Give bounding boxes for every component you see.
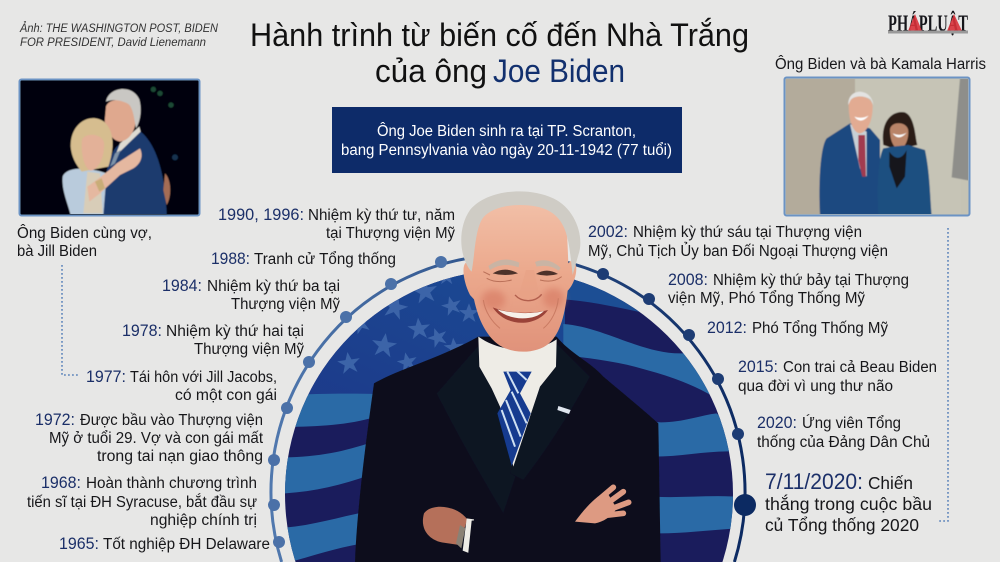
title: Hành trình từ biến cố đến Nhà Trắng	[250, 17, 749, 53]
photo credit: FOR PRESIDENT, David Lienemann	[20, 37, 206, 49]
timeline: 1968: 1968:	[41, 474, 81, 492]
left hand	[423, 507, 467, 545]
caption: Biden and Jill: bà Jill Biden	[17, 243, 97, 260]
timeline ring	[268, 255, 745, 562]
timeline: 7/11/2020: thắng trong cuộc bầu	[765, 493, 932, 514]
right hand	[575, 495, 616, 524]
brows	[488, 260, 561, 271]
timeline dots: right	[597, 268, 756, 516]
timeline: 1978: Nhiệm kỳ thứ hai tại	[166, 323, 304, 340]
timeline: 1984: Nhiệm kỳ thứ ba tại	[207, 278, 340, 295]
timeline: 1978	[122, 322, 304, 358]
title: của ông	[375, 53, 487, 89]
timeline: 1977: có một con gái	[175, 387, 277, 404]
timeline: 1978: 1978:	[122, 322, 162, 340]
cuff and watch	[463, 518, 474, 554]
timeline: 1984: Thượng viện Mỹ	[231, 296, 340, 313]
timeline: 2008: Nhiệm kỳ thứ bảy tại Thượng	[713, 272, 909, 289]
timeline: 1984	[162, 277, 340, 313]
timeline: 2015: 2015:	[738, 358, 778, 376]
flag circle	[285, 274, 733, 562]
timeline: 1972: 1972:	[35, 411, 75, 429]
timeline: 2008: 2008:	[668, 271, 708, 289]
photo: Biden and Kamala Harris	[784, 78, 970, 216]
timeline: 1972	[35, 411, 264, 465]
caption: Biden and Jill	[17, 225, 152, 260]
timeline: 2002: 2002:	[588, 223, 628, 241]
timeline: 2002	[588, 223, 888, 260]
face shading	[481, 288, 564, 310]
timeline: 1968: Hoàn thành chương trình	[86, 475, 257, 492]
sleeve shading	[468, 520, 474, 554]
timeline: 2008	[668, 271, 909, 307]
timeline: 1977: 1977:	[86, 368, 126, 386]
timeline: 2015: qua đời vì ung thư não	[738, 378, 893, 395]
timeline dots: left	[268, 256, 447, 548]
timeline: 1990, 1996: 1990, 1996:	[218, 206, 304, 224]
panel: birth info: Ông Joe Biden sinh ra tại TP. Scranton,	[377, 123, 636, 140]
timeline: 2002: Mỹ, Chủ Tịch Ủy ban Đối Ngoại Thượng viện	[588, 242, 888, 260]
hair	[461, 191, 580, 275]
timeline: 2012: 2012:	[707, 319, 747, 337]
timeline: 1990, 1996: tại Thượng viện Mỹ	[326, 225, 455, 242]
timeline: 1988: Tranh cử Tổng thống	[254, 251, 396, 268]
pin	[557, 406, 571, 414]
timeline: 1988: 1988:	[211, 250, 250, 268]
photo credit: Ảnh: THE WASHINGTON POST, BIDEN	[19, 22, 219, 35]
caption: Biden and Harris: Ông Biden và bà Kamala Harris	[775, 56, 986, 73]
connector: left dotted line	[62, 265, 80, 375]
title: Joe Biden	[493, 53, 625, 89]
tie	[497, 372, 532, 466]
timeline: 2020: 2020:	[757, 414, 797, 432]
timeline: 2012	[707, 319, 888, 337]
timeline: 1978: Thượng viện Mỹ	[194, 341, 304, 358]
timeline: 7/11/2020: củ Tổng thống 2020	[765, 515, 919, 535]
timeline: 2020	[757, 414, 930, 451]
caption: Biden and Jill: Ông Biden cùng vợ,	[17, 225, 152, 242]
title	[250, 17, 749, 89]
timeline: 1965: Tốt nghiệp ĐH Delaware	[103, 536, 270, 553]
nose	[519, 270, 539, 299]
jacket	[355, 337, 661, 562]
flag stars	[338, 278, 477, 374]
timeline: 7/11/2020	[765, 469, 932, 535]
smile	[493, 307, 548, 323]
timeline: 2002: Nhiệm kỳ thứ sáu tại Thượng viện	[633, 224, 862, 241]
timeline: 1984: 1984:	[162, 277, 202, 295]
eye wrinkles	[483, 272, 562, 282]
shirt	[478, 337, 557, 467]
timeline: 1965: 1965:	[59, 535, 99, 553]
timeline: 1990, 1996: Nhiệm kỳ thứ tư, năm	[308, 207, 455, 224]
timeline: 2008: viện Mỹ, Phó Tổng Thống Mỹ	[668, 290, 865, 307]
panel: birth info	[332, 107, 682, 173]
timeline: 1968: tiến sĩ tại ĐH Syracuse, bắt đầu sự	[27, 494, 257, 511]
timeline: 1972: Mỹ ở tuổi 29. Vợ và con gái mất	[49, 430, 264, 447]
photo credit	[19, 22, 219, 49]
panel: birth info: bang Pennsylvania vào ngày 20-11-1942 (77 tuổi)	[341, 142, 672, 159]
timeline: 1968: nghiệp chính trị	[150, 512, 257, 529]
timeline: 1977	[86, 368, 277, 404]
head	[463, 200, 576, 352]
timeline: 2015	[738, 358, 937, 395]
timeline: 7/11/2020: 7/11/2020:	[765, 469, 863, 494]
timeline: 1972: trong tai nạn giao thông	[97, 448, 263, 465]
timeline: 1972: Được bầu vào Thượng viện	[80, 412, 263, 429]
timeline: 7/11/2020: Chiến	[868, 473, 913, 493]
timeline: 2012: Phó Tổng Thống Mỹ	[752, 320, 888, 337]
eyes	[493, 270, 558, 276]
timeline: 2020: thống của Đảng Dân Chủ	[757, 434, 930, 451]
photo: Biden and wife Jill	[20, 80, 200, 216]
connector: right dotted line	[937, 228, 948, 521]
timeline: 2020: Ứng viên Tổng	[802, 415, 901, 432]
timeline: 1990, 1996	[218, 206, 455, 242]
timeline: 2015: Con trai cả Beau Biden	[783, 359, 937, 376]
portrait: Joe Biden	[355, 191, 661, 562]
timeline: 1977: Tái hôn với Jill Jacobs,	[130, 369, 277, 386]
timeline: 1968	[27, 474, 257, 529]
